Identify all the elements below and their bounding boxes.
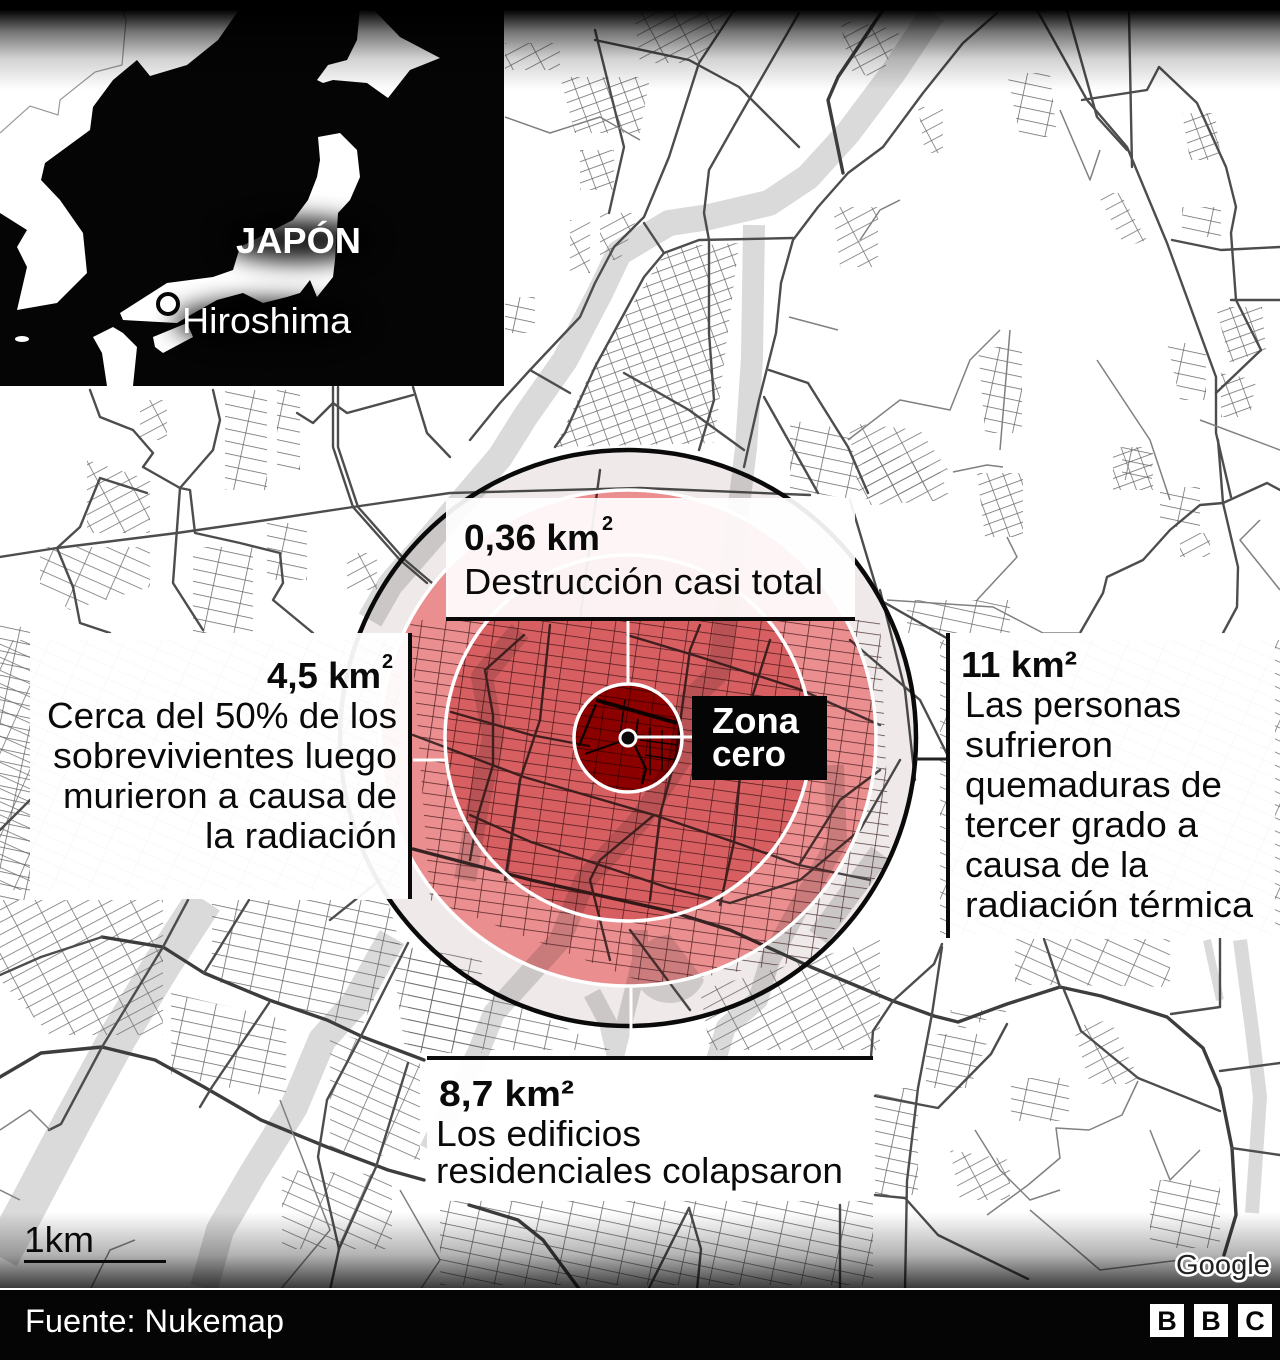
panel: 4,5 km2: Cerca del 50% de los bbox=[47, 695, 397, 736]
Google attribution: Google bbox=[1176, 1249, 1270, 1280]
panel: 0,36 km2: 0,36 km bbox=[464, 517, 600, 558]
callout: Zona cero: Zona bbox=[712, 700, 800, 741]
scale bar: 1 km bbox=[24, 1219, 166, 1263]
ground zero marker bbox=[620, 730, 636, 746]
roads inside ground zero bbox=[579, 700, 678, 784]
panel: 8,7 km2 bbox=[427, 1056, 873, 1201]
panel: 8,7 km2: Los edificios bbox=[436, 1113, 641, 1154]
BBC logo: B bbox=[1201, 1306, 1221, 1336]
zone: 11 km2 thermal radiation bbox=[340, 450, 916, 1026]
outer black ring bbox=[340, 450, 916, 1026]
blast radius zones bbox=[340, 450, 948, 1056]
panel: 11 km2: radiación térmica bbox=[965, 884, 1254, 925]
panel: 8,7 km2: 8,7 km² bbox=[439, 1073, 574, 1114]
mainland Asia and Korea bbox=[0, 4, 243, 310]
BBC logo: C bbox=[1245, 1306, 1265, 1336]
connector lines bbox=[413, 618, 692, 1056]
inset map: Japan bbox=[0, 0, 504, 386]
dark connector to right panel bbox=[916, 758, 948, 760]
ring outlines bbox=[380, 490, 876, 986]
label halos bbox=[222, 218, 374, 262]
land border bbox=[0, 4, 126, 133]
panel: 11 km2: sufrieron bbox=[965, 724, 1113, 765]
callout: Zona cero bbox=[692, 696, 827, 780]
source: Fuente: Nukemap bbox=[25, 1303, 284, 1339]
panel: 11 km2: tercer grado a bbox=[965, 804, 1199, 845]
BBC logo bbox=[1150, 1304, 1272, 1337]
panel: 4,5 km2 bbox=[30, 633, 412, 899]
panel: 11 km2: 11 km² bbox=[961, 644, 1077, 685]
zone: 8,7 km2 collapsed buildings bbox=[380, 490, 876, 986]
Honshu bbox=[120, 133, 360, 323]
panel: 0,36 km2: 2 bbox=[602, 513, 613, 535]
panel: 11 km2 bbox=[946, 633, 1275, 938]
scale bar: 1 km: 1km bbox=[24, 1219, 94, 1260]
footer bar bbox=[0, 1288, 1280, 1360]
zone: 4,5 km2 radiation bbox=[445, 555, 811, 921]
Hokkaido bbox=[317, 6, 440, 98]
Kyushu bbox=[93, 327, 137, 386]
panel: 4,5 km2: 4,5 km bbox=[267, 655, 381, 696]
Shikoku bbox=[153, 323, 193, 353]
BBC logo: B bbox=[1157, 1306, 1177, 1336]
panel: 8,7 km2: residenciales colapsaron bbox=[436, 1150, 843, 1191]
panel: 0,36 km2 bbox=[446, 498, 855, 621]
panel: 11 km2: Las personas bbox=[965, 684, 1181, 725]
panel: 11 km2: quemaduras de bbox=[965, 764, 1222, 805]
callout: Zona cero: cero bbox=[712, 733, 786, 774]
panel: 4,5 km2: sobrevivientes luego bbox=[53, 735, 397, 776]
panel: 0,36 km2: Destrucción casi total bbox=[464, 561, 823, 602]
panel: 4,5 km2: 2 bbox=[382, 651, 393, 673]
zone: 0,36 km2 near total destruction bbox=[574, 684, 682, 792]
label: Hiroshima: Hiroshima bbox=[182, 300, 352, 341]
panel: 4,5 km2: murieron a causa de bbox=[63, 775, 397, 816]
panel: 4,5 km2: la radiación bbox=[205, 815, 397, 856]
panel: 11 km2: causa de la bbox=[965, 844, 1149, 885]
small island bbox=[15, 336, 29, 342]
icon: Hiroshima location marker bbox=[158, 294, 178, 314]
label: Japan: JAPÓN bbox=[236, 219, 361, 261]
